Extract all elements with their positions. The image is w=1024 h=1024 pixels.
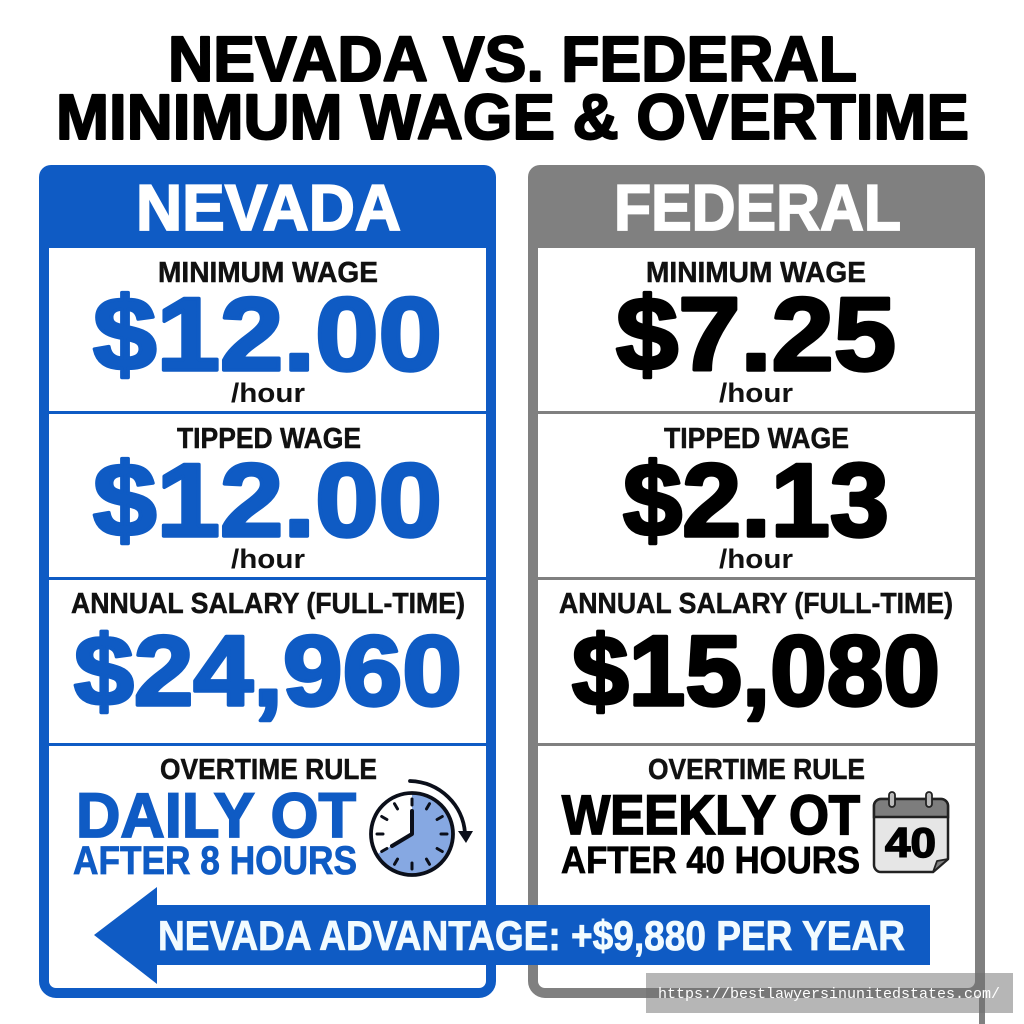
icon: calendar 40: 40 xyxy=(885,819,936,866)
federal heading: FEDERAL xyxy=(614,171,901,244)
watermark xyxy=(646,973,1013,1013)
federal minimum wage: MINIMUM WAGE xyxy=(646,257,866,289)
nevada overtime rule: OVERTIME RULE xyxy=(160,754,377,786)
nevada annual salary: $24,960 xyxy=(74,615,462,726)
nevada minimum wage: /hour xyxy=(231,378,306,408)
nevada annual salary: ANNUAL SALARY (FULL-TIME) xyxy=(71,588,465,620)
icon: calendar 40 xyxy=(874,792,948,872)
federal annual salary: ANNUAL SALARY (FULL-TIME) xyxy=(559,588,953,620)
nevada overtime rule: AFTER 8 HOURS xyxy=(73,839,357,883)
federal tipped wage: /hour xyxy=(719,544,794,574)
federal annual salary: $15,080 xyxy=(572,615,940,726)
nevada tipped wage: $12.00 xyxy=(93,443,442,559)
title: NEVADA VS. FEDERAL xyxy=(168,23,857,95)
nevada minimum wage: MINIMUM WAGE xyxy=(158,257,378,289)
arrow: nevada advantage xyxy=(94,887,930,984)
nevada overtime rule xyxy=(73,754,377,883)
federal overtime rule: WEEKLY OT xyxy=(562,783,860,846)
watermark: https://bestlawyersinunitedstates.com/ xyxy=(658,986,1000,1003)
federal minimum wage: /hour xyxy=(719,378,794,408)
federal minimum wage: $7.25 xyxy=(616,277,896,393)
nevada tipped wage: /hour xyxy=(231,544,306,574)
federal overtime rule: AFTER 40 HOURS xyxy=(561,840,860,882)
nevada overtime rule: DAILY OT xyxy=(76,781,356,851)
federal overtime rule xyxy=(561,754,865,882)
icon: clock with arrow xyxy=(371,781,473,875)
federal overtime rule: OVERTIME RULE xyxy=(648,754,865,786)
arrow: nevada advantage: NEVADA ADVANTAGE: +$9,880 PER YEAR xyxy=(158,912,905,959)
nevada minimum wage: $12.00 xyxy=(93,277,442,393)
federal tipped wage: $2.13 xyxy=(623,443,889,559)
panel: federal xyxy=(528,165,985,1024)
federal tipped wage: TIPPED WAGE xyxy=(664,423,849,455)
nevada heading: NEVADA xyxy=(136,171,401,244)
nevada tipped wage: TIPPED WAGE xyxy=(177,423,361,455)
title xyxy=(56,23,969,153)
title: MINIMUM WAGE & OVERTIME xyxy=(56,81,969,153)
panel: nevada xyxy=(39,165,496,993)
